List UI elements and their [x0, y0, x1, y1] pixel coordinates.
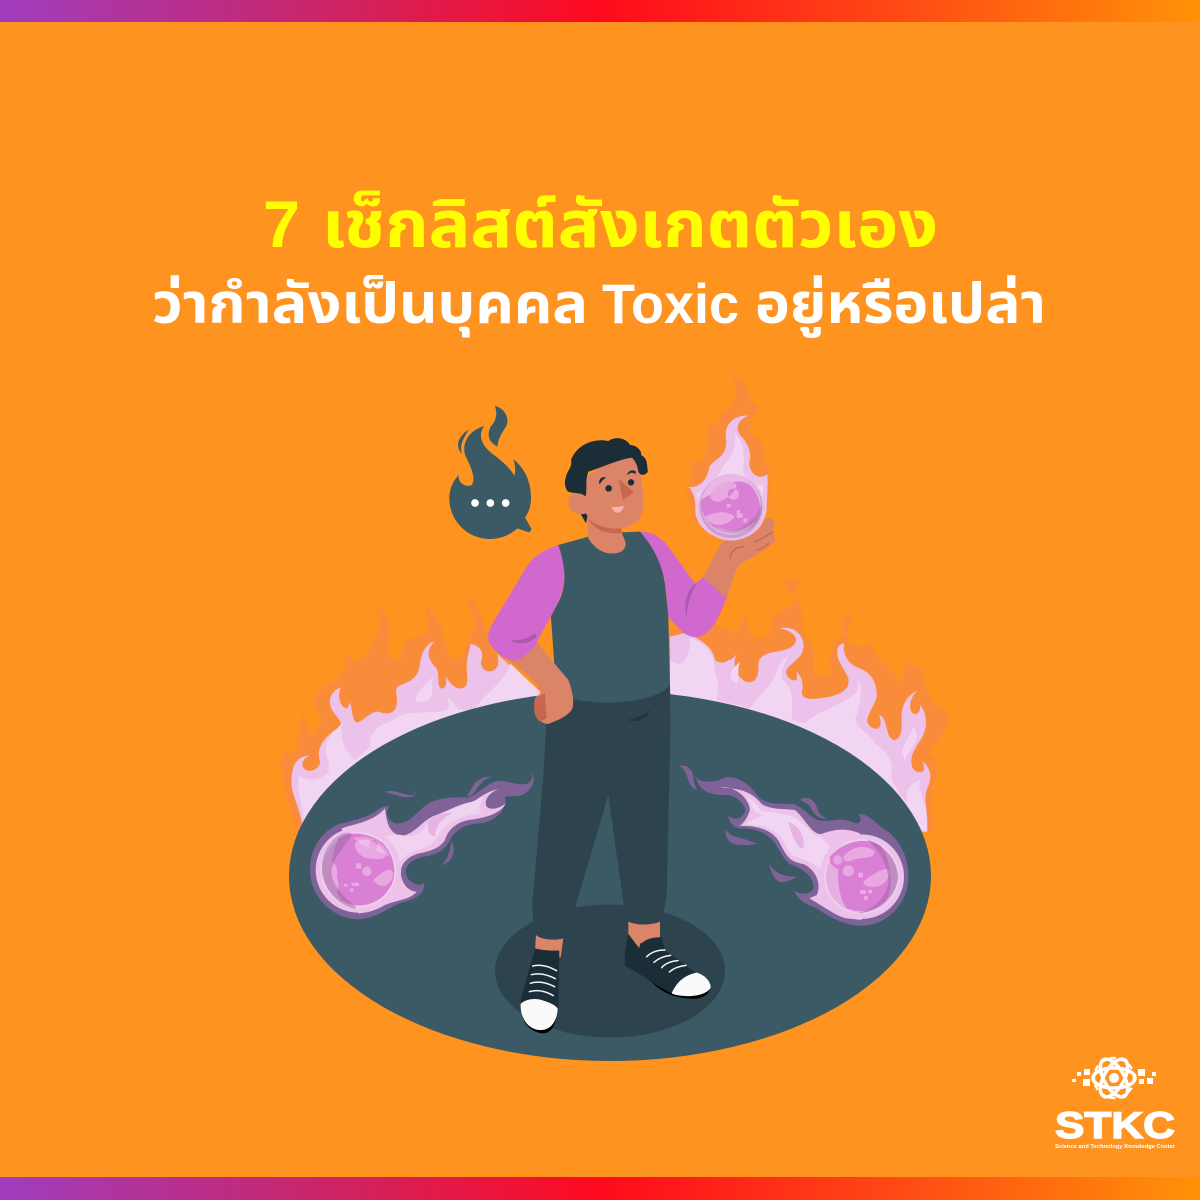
- raised hand and forearm: [702, 518, 775, 600]
- logo atom mark: [1093, 1055, 1135, 1101]
- neck: [587, 513, 626, 553]
- title line 2: [152, 272, 1046, 338]
- eyes: [605, 485, 612, 492]
- left fireball sphere: [316, 827, 401, 913]
- right fireball tail highlight: [745, 797, 830, 870]
- left forearm and fist: [508, 642, 573, 724]
- left sleeve shadow: [509, 633, 537, 643]
- mouth: [612, 506, 624, 513]
- flames behind platform: right: [670, 580, 949, 832]
- left outer orange flame: [281, 595, 503, 833]
- left shoe: [522, 1010, 557, 1033]
- title line 1: เช็กลิสต์สังเกตตัวเอง: [322, 187, 938, 261]
- left light flame: [298, 663, 540, 833]
- right fireball wisps: [679, 766, 827, 882]
- right fireball tail outline: [696, 776, 908, 926]
- nose: [619, 479, 634, 500]
- title: [152, 187, 1046, 338]
- pants fold: [627, 709, 651, 721]
- hand creases: [730, 532, 773, 558]
- right pink flame: [670, 628, 930, 832]
- right fireball tail: [720, 787, 862, 920]
- pants and legs: [532, 685, 671, 938]
- raised hand fire orb flames: [686, 377, 770, 541]
- flames behind platform: left: [281, 595, 542, 840]
- right sleeve: [640, 532, 727, 637]
- hair: [565, 438, 648, 497]
- fist shadow: [534, 693, 547, 722]
- right light flame: [670, 637, 923, 830]
- left shoe laces: [529, 965, 557, 996]
- hair back: [581, 512, 588, 523]
- bottom gradient bar: [0, 1177, 1200, 1200]
- left fireball wisps: [385, 777, 493, 865]
- orb interior: [701, 475, 761, 535]
- right ankle: [628, 922, 660, 948]
- right sleeve shadow: [685, 583, 696, 618]
- left fireball tail outline: [310, 772, 534, 919]
- top gradient bar: [0, 0, 1200, 22]
- left sleeve: [488, 545, 564, 660]
- standing shadow ellipse: [495, 904, 725, 1038]
- title line 1: 7: [263, 187, 300, 261]
- STKC logo: [1055, 1055, 1176, 1150]
- face: [568, 457, 643, 529]
- right shoe: [625, 963, 710, 999]
- left ankle: [535, 935, 563, 957]
- right shoe laces: [647, 950, 686, 972]
- title line 2: อยู่หรือเปล่า: [755, 272, 1046, 338]
- logo pixel squares: [1072, 1069, 1156, 1086]
- shoes: [521, 922, 711, 1033]
- neck shadow: [588, 518, 622, 533]
- title line 2: ว่ากำลังเป็นบุคคล: [152, 272, 588, 338]
- right fireball: [679, 766, 908, 926]
- left pink flame: [291, 641, 542, 840]
- logo wordmark: STKC: [1055, 1105, 1175, 1146]
- left fireball tail: [342, 789, 506, 913]
- title line 2: Toxic: [602, 272, 739, 335]
- platform ellipse: [289, 691, 931, 1061]
- eyebrows: [599, 477, 606, 484]
- left fireball: [310, 772, 534, 919]
- speech bubble dots: [471, 499, 509, 507]
- vest: [551, 532, 670, 703]
- logo tagline: Science and Technology Knowledge Center: [1055, 1144, 1176, 1150]
- right outer orange flame: [670, 580, 949, 832]
- right fireball sphere: [819, 834, 904, 919]
- icon: flame speech bubble: [449, 406, 532, 539]
- person and speech bubble: [449, 377, 775, 938]
- left fireball tail highlight: [370, 797, 483, 873]
